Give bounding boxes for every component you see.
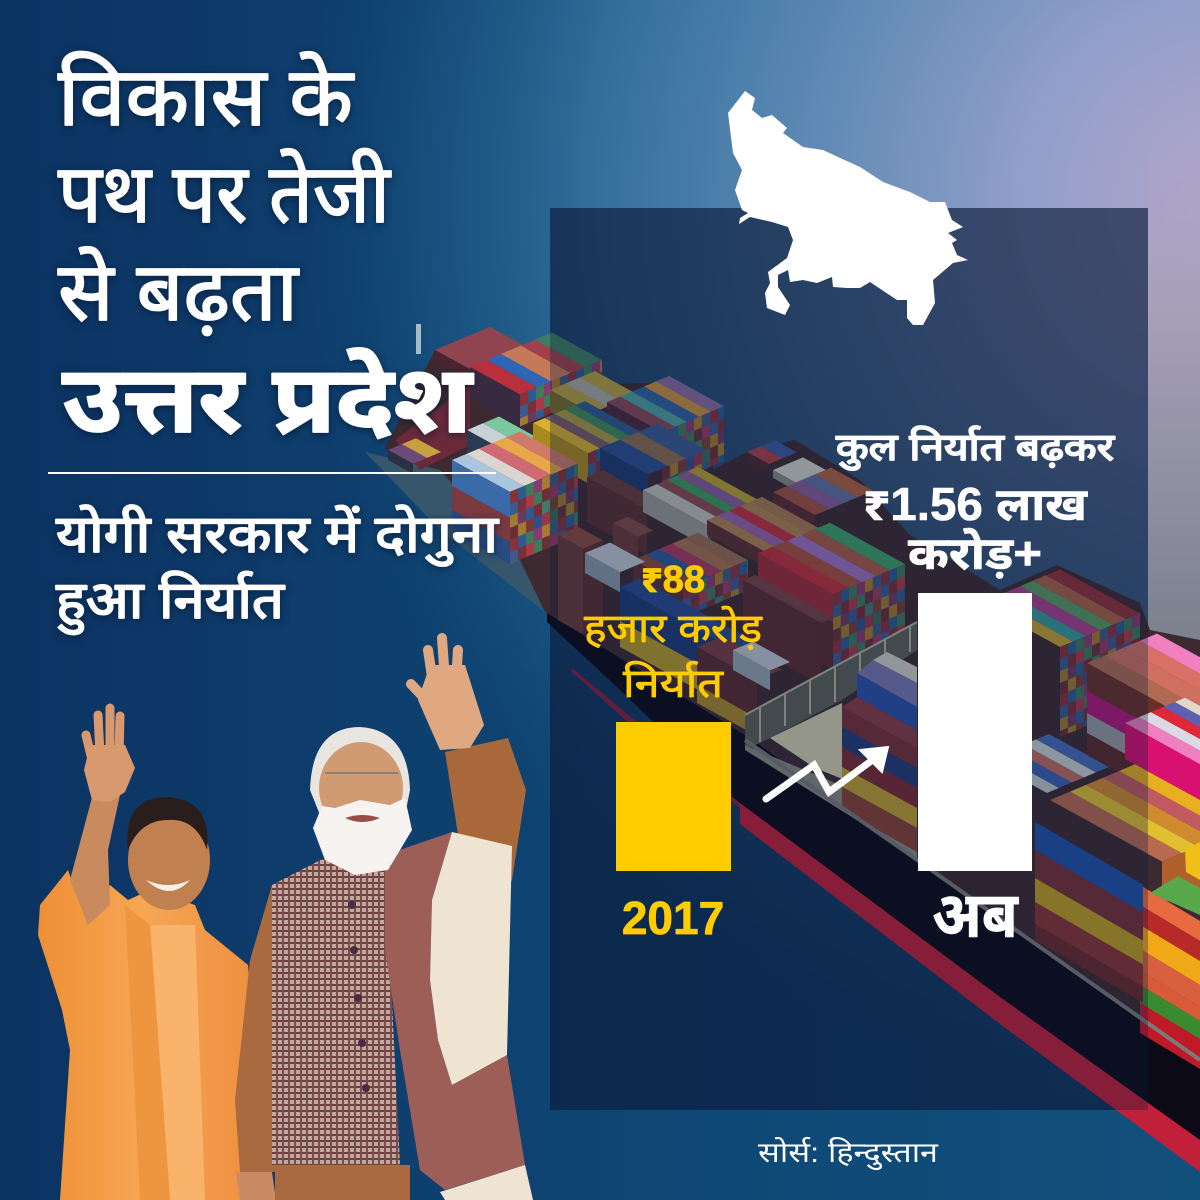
- title: [58, 51, 474, 452]
- head: [310, 727, 410, 815]
- map: Uttar Pradesh: [728, 91, 968, 325]
- head: [128, 810, 210, 910]
- person: left, orange robes: [38, 708, 251, 1200]
- title: उत्तर प्रदेश: [62, 347, 474, 452]
- stack row: midship: [558, 440, 905, 736]
- raised arm: [70, 790, 120, 925]
- label: now value: ₹1.56 लाख: [863, 478, 1088, 530]
- source: सोर्स: हिन्दुस्तान: [758, 1136, 939, 1171]
- gantry and deck: [745, 622, 917, 858]
- divider line: [48, 472, 496, 474]
- mast: [416, 324, 421, 354]
- label: 2017 value: हजार करोड़: [584, 606, 763, 651]
- buttons: [348, 901, 370, 1092]
- near stack behind arrow: [842, 652, 917, 852]
- ship hull: [547, 613, 1200, 1145]
- stern stacks: [980, 569, 1200, 1070]
- bow structure: [365, 452, 545, 612]
- arrow: growth: [766, 747, 888, 799]
- chart panel: [550, 208, 1148, 1110]
- stack row: bow: [388, 327, 724, 564]
- label: 2017 value: ₹88: [641, 559, 705, 601]
- hand: [411, 638, 484, 750]
- robe: [38, 870, 251, 1200]
- title: से बढ़ता: [58, 246, 300, 338]
- label: 2017 value: [584, 559, 763, 944]
- bar: now: [836, 425, 1116, 951]
- ship deck base: [385, 328, 1200, 1062]
- person: right, brown kurta and shawl: [235, 638, 533, 1200]
- label: now value: [836, 425, 1116, 951]
- left sleeve: [235, 885, 275, 1172]
- right arm: [445, 738, 526, 945]
- waistcoat: [272, 855, 400, 1165]
- title: विकास के: [58, 51, 355, 143]
- subtitle: [56, 505, 500, 635]
- label: now value: अब: [932, 879, 1019, 951]
- bar: 2017: [584, 559, 763, 944]
- container ship: [365, 324, 1200, 1172]
- label: now value: करोड़+: [908, 527, 1042, 579]
- label: now value: कुल निर्यात बढ़कर: [836, 425, 1116, 470]
- beard: [313, 798, 412, 875]
- deck rail: [745, 740, 1200, 1060]
- shawl border: [385, 832, 525, 1190]
- kurta lower: [275, 1165, 410, 1200]
- panel tint over ship: [550, 208, 1148, 1110]
- subtitle: हुआ निर्यात: [56, 571, 285, 635]
- glasses: [325, 772, 398, 774]
- hand: [84, 708, 135, 802]
- label: 2017 value: निर्यात: [623, 661, 724, 706]
- hull waterline stripe: [740, 803, 1200, 1172]
- label: 2017 value: 2017: [622, 892, 724, 944]
- shawl cream: [430, 832, 512, 1085]
- subtitle: योगी सरकार में दोगुना: [56, 505, 500, 567]
- title: पथ पर तेजी: [58, 148, 392, 240]
